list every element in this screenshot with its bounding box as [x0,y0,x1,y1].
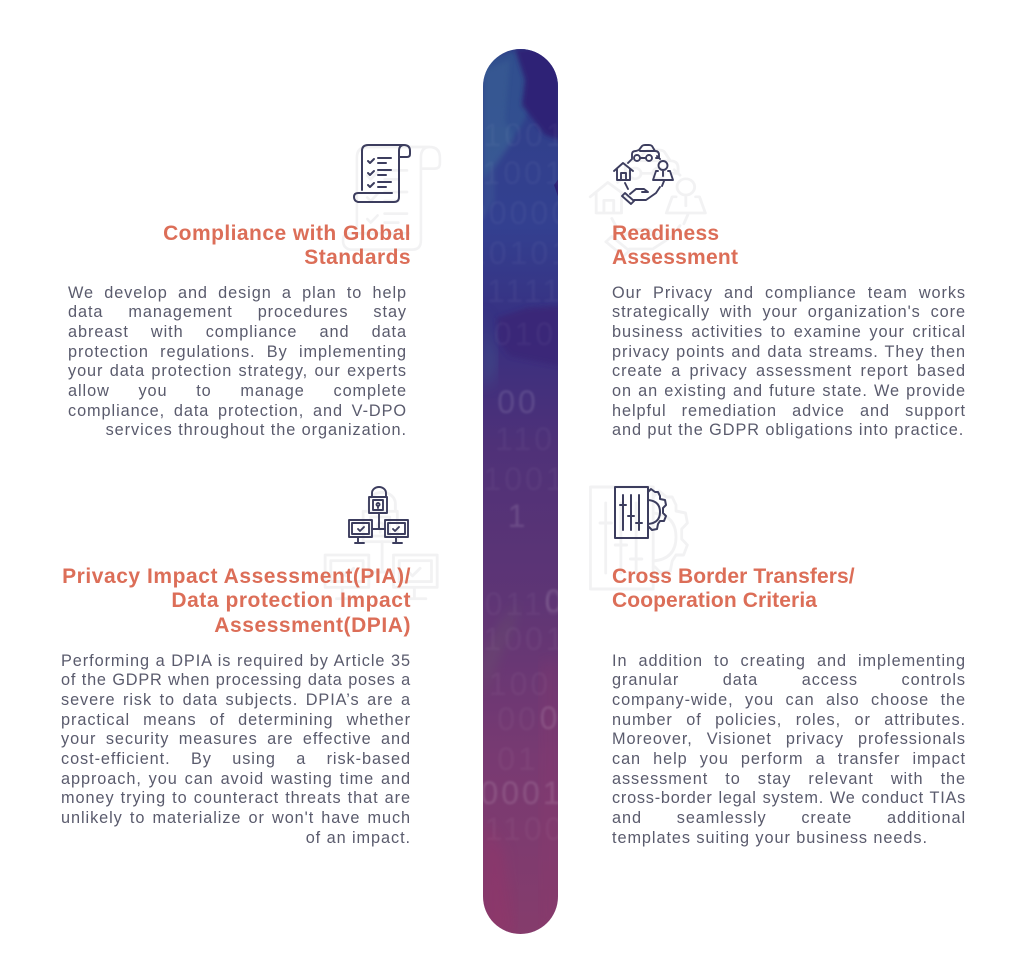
central gradient pill: 1111 [487,273,563,309]
heading: Readiness Assessment [612,222,738,269]
heading: Cross Border Transfers / Cooperation Criteria [612,565,855,612]
text: compliance description: services throughout the organization. [106,421,407,439]
central gradient pill: 00 [497,384,539,420]
text: readiness description: on an existing and future state. We provide [612,382,966,400]
text: cross border description: cross-border legal system. We conduct TIAs [612,789,966,807]
central gradient pill [483,49,558,934]
central gradient pill: 01 [497,741,539,777]
text: readiness description: and put the GDPR obligations into practice. [612,421,964,439]
text: cross border description [612,652,966,847]
heading: Compliance with Global Standards: Compliance with Global [163,222,411,245]
heading: Cross Border Transfers / Cooperation Criteria: Cooperation Criteria [612,589,817,612]
text: cross border description: templates suiting your business needs. [612,829,928,847]
central gradient pill: 00 [497,701,539,737]
central gradient pill: 0 [540,700,560,736]
text: DPIA description: severe risk to data subjects. DPIA’s are a [61,691,411,709]
central gradient pill: 1001 [483,117,567,153]
central gradient pill: 1001 [482,155,566,191]
central gradient pill: 1001 [483,461,567,497]
heading: Cross Border Transfers / Cooperation Criteria: Cross Border Transfers/ [612,565,855,588]
central gradient pill: 1100 [485,811,565,847]
heading: Privacy Impact Assessment and Data protection Impact Assessment: Data protection Impact [171,589,411,612]
heading: Compliance with Global Standards [163,222,411,269]
text: compliance description: compliance, data protection, and V-DPO [68,402,407,420]
text: compliance description: data management procedures stay [68,303,407,321]
text: readiness description [612,284,966,439]
text: DPIA description: unlikely to materialize or won't have much [61,809,411,827]
central gradient pill: 1 [508,498,528,534]
text: readiness description: helpful remediation advice and support [612,402,966,420]
central gradient pill: 0110 [485,586,565,622]
text: DPIA description: of an impact. [306,829,411,847]
heading: Compliance with Global Standards: Standards [304,246,411,269]
text: compliance description: We develop and design a plan to help [68,284,407,302]
text: DPIA description: of the GDPR when processing data poses a [61,671,411,689]
text: DPIA description: cost-efficient. By using a risk-based [61,750,411,768]
text: cross border description: and seamlessly create additional [612,809,966,827]
text: compliance description [68,284,407,439]
heading: Privacy Impact Assessment and Data protection Impact Assessment: Privacy Impact Assessment(PIA)/ [62,565,411,588]
text: compliance description: abreast with compliance and data [68,323,407,341]
text: readiness description: create a privacy assessment report based [612,362,966,380]
text: readiness description: strategically with your organization's core [612,303,966,321]
central gradient pill: 110 [495,421,555,457]
central gradient pill: 0 [545,583,565,619]
text: cross border description: number of policies, roles, or attributes. [612,711,966,729]
heading: Privacy Impact Assessment and Data protection Impact Assessment: Assessment(DPIA) [214,614,411,637]
text: DPIA description: Performing a DPIA is required by Article 35 [61,652,411,670]
heading: Privacy Impact Assessment and Data protection Impact Assessment [62,565,411,637]
central gradient pill: 10101 [468,235,572,271]
text: DPIA description: approach, you can avoid wasting time and [61,770,411,788]
text: readiness description: Our Privacy and compliance team works [612,284,966,302]
text: DPIA description: money trying to counteract threats that are [61,789,411,807]
heading: Readiness Assessment: Readiness [612,222,719,245]
text: readiness description: business activities to examine your critical [612,323,966,341]
text: readiness description: privacy points and data streams. They then [612,343,966,361]
central gradient pill: 0001 [480,775,564,811]
central gradient pill: 00000 [468,195,572,231]
text: compliance description: protection regulations. By implementing [68,343,407,361]
central gradient pill: 010 [494,316,556,352]
heading: Readiness Assessment: Assessment [612,246,738,269]
text: cross border description: company-wide, you can also choose the [612,691,966,709]
text: cross border description: Moreover, Visionet privacy professionals [612,730,966,748]
central gradient pill: 1001 [483,621,567,657]
text: DPIA description: practical means of determining whether [61,711,411,729]
text: compliance description: your data protection strategy, our experts [68,362,407,380]
text: cross border description: In addition to creating and implementing [612,652,966,670]
central gradient pill: 100 [489,666,551,702]
text: cross border description: granular data access controls [612,671,966,689]
text: DPIA description [61,652,411,847]
text: DPIA description: your security measures are effective and [61,730,411,748]
text: compliance description: allow you to manage complete [68,382,407,400]
text: cross border description: assessment to stay relevant with the [612,770,966,788]
text: cross border description: can help you perform a transfer impact [612,750,966,768]
